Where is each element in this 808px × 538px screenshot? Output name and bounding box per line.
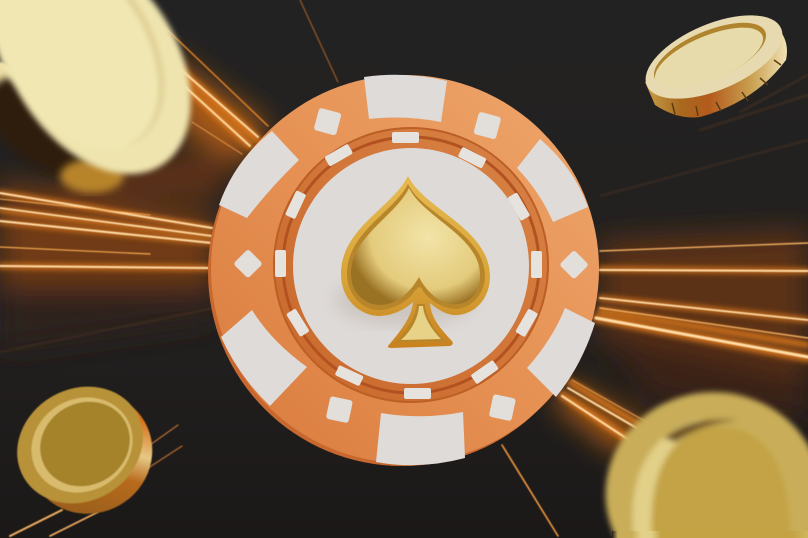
coin: bottom left [0, 364, 175, 536]
coin: top left blurred [0, 0, 231, 209]
ring dashes [275, 132, 542, 399]
coin: top right [634, 0, 794, 117]
chip face [211, 75, 599, 463]
faint streaks [0, 75, 808, 352]
white rim segments [219, 75, 595, 465]
poker chip [208, 75, 599, 466]
inner orange ring [274, 128, 548, 402]
streak halos [0, 68, 808, 442]
rim squares [233, 108, 589, 423]
chip edge [208, 78, 596, 466]
icon: golden spade [341, 176, 490, 348]
light streaks glow [0, 50, 808, 455]
center disc [293, 148, 529, 384]
coin: bottom right blurred [606, 392, 808, 538]
spade shadow [335, 274, 475, 326]
